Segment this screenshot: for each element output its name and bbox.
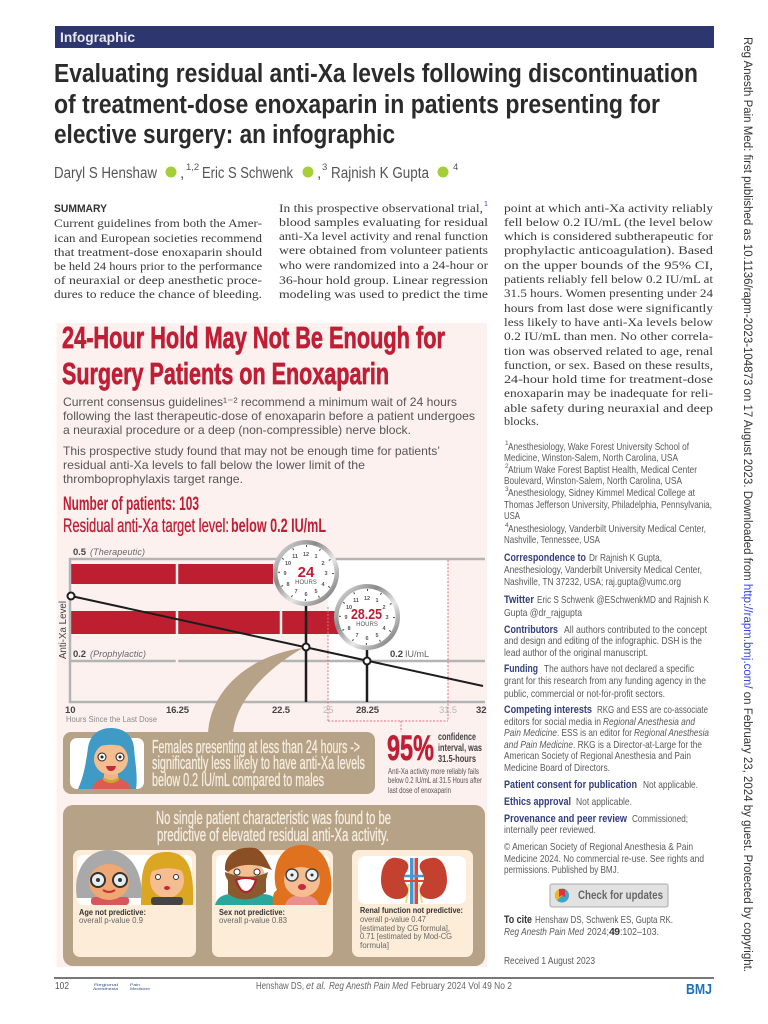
ethics approval: Ethics approval <box>504 796 571 808</box>
clock: 28.25 hours: 4 <box>382 626 386 632</box>
panel: no predictive characteristic: No single patient characteristic was found to be <box>156 808 391 828</box>
line chart: anti-Xa level over time: 0.2 <box>73 649 86 660</box>
summary column 2: anti-Xa level activity and renal function <box>279 229 488 243</box>
affiliations: 3 <box>505 486 509 493</box>
infographic heading <box>62 321 445 391</box>
button: check for updates: Check for updates <box>578 890 663 902</box>
correspondence <box>504 552 702 588</box>
citation: Reg Anesth Pain Med <box>504 927 585 938</box>
banner: Infographic <box>55 26 714 48</box>
clock: 28.25 hours: 10 <box>346 605 352 611</box>
summary column 3: on the upper bounds of the 95% CI, <box>504 258 713 272</box>
competing interests: Regional Anesthesia and <box>603 717 696 728</box>
clock: 28.25 hours: 5 <box>375 633 379 639</box>
clock: 28.25 hours: 1 <box>375 598 379 604</box>
footer: BMJ <box>686 981 712 998</box>
summary column 3: function, or sex. Based on these results, <box>504 358 713 372</box>
competing interests: Pain Medicine <box>504 728 557 739</box>
summary column 3: fell below 0.2 IU/mL (the level below <box>504 215 713 229</box>
summary column 1: be held 24 hours prior to the performance <box>54 259 262 273</box>
footer: Pain <box>130 982 140 987</box>
button: check for updates <box>550 884 668 907</box>
card: sex: overall p-value 0.83 <box>219 916 288 925</box>
study numbers: Number of patients: 103 <box>63 494 199 515</box>
ethics approval <box>504 796 632 808</box>
contributors: and design and editing of the infographic. DSH is the <box>504 636 702 647</box>
clock: 28.25 hours: HOURS <box>356 622 378 628</box>
callout: 95% confidence interval: 95% <box>387 729 434 768</box>
copyright: © American Society of Regional Anesthesia & Pain <box>504 842 693 853</box>
icon: man and woman <box>215 845 331 905</box>
correspondence: Correspondence to <box>504 552 586 564</box>
clock: 28.25 hours: 2 <box>382 605 386 611</box>
clock: 24 hours: 24 <box>298 564 315 581</box>
summary column 3: enoxaparin may be inadequate for reli- <box>504 386 713 400</box>
intro text: residual anti-Xa levels to fall below the lower limit of the <box>63 458 365 472</box>
footer: et al. <box>306 980 326 992</box>
funding: Funding <box>504 663 538 675</box>
footer: Reg Anesth Pain Med <box>329 980 409 992</box>
summary column 3: prophylactic anticoagulation). Based <box>504 243 713 257</box>
clock: 24 hours: HOURS <box>295 580 317 586</box>
card: renal function: overall p-value 0.47 <box>360 915 427 924</box>
summary column 2: In this prospective observational trial, <box>279 201 483 215</box>
provenance: Commissioned; <box>632 814 688 825</box>
competing interests: . RKG is a Director-at-Large for the <box>573 740 702 751</box>
study numbers: Residual anti-Xa target level: <box>63 516 229 537</box>
clock: 24 hours: 6 <box>304 592 308 598</box>
icon: kidneys <box>381 858 447 904</box>
affiliations: USA <box>504 511 520 522</box>
clock: 24 hours <box>273 540 339 606</box>
card: renal function <box>352 850 473 957</box>
summary column 3: hours from last dose were significantly <box>504 301 713 315</box>
twitter <box>504 594 709 619</box>
line chart: anti-Xa level over time: 16.25 <box>166 705 190 716</box>
infographic heading: Surgery Patients on Enoxaparin <box>62 357 389 391</box>
card: age <box>73 850 196 957</box>
callout: 95% confidence interval: 31.5-hours <box>438 753 476 765</box>
affiliations: Boulevard, Winston-Salem, North Carolina, USA <box>504 476 682 487</box>
clock: 24 hours: 8 <box>286 582 290 588</box>
card: sex: Sex not predictive: <box>219 908 285 917</box>
card: renal function: Renal function not predictive: <box>360 906 463 915</box>
twitter: Twitter <box>504 594 535 606</box>
summary column 1 <box>54 203 262 301</box>
clock: 24 hours: 4 <box>321 582 325 588</box>
summary column 3: 0.2 IU/mL than men. No other correla- <box>504 329 713 343</box>
ethics approval: Not applicable. <box>576 797 632 808</box>
title: elective surgery: an infographic <box>54 121 395 149</box>
affiliations: 1 <box>505 440 509 447</box>
callout: 95% confidence interval: confidence <box>438 731 476 743</box>
authors: 3 <box>322 162 327 173</box>
summary column 2: blood samples evaluating for residual <box>279 215 489 229</box>
title: of treatment-dose enoxaparin in patients presenting for <box>54 91 660 119</box>
footer: Anesthesia <box>93 986 119 991</box>
icon: older and younger women <box>76 850 193 905</box>
funding: The authors have not declared a specific <box>544 664 694 675</box>
footer: 102 <box>55 980 69 992</box>
patient consent: Patient consent for publication <box>504 779 637 791</box>
citation: :102–103. <box>620 927 659 938</box>
authors: , <box>317 165 321 182</box>
line chart: anti-Xa level over time: 32 <box>476 705 487 716</box>
intro text: This prospective study found that may not be enough time for patients’ <box>63 444 440 458</box>
affiliations: Anesthesiology, Vanderbilt University Medical Center, <box>508 524 706 535</box>
line chart: anti-Xa level over time: Hours Since the Last Dose <box>66 714 157 724</box>
callout: 95% confidence interval <box>387 729 482 795</box>
contributors: lead author of the original manuscript. <box>504 648 648 659</box>
clock: 24 hours: 5 <box>314 589 318 595</box>
study numbers <box>63 494 326 537</box>
callout: 95% confidence interval: last dose of enoxaparin <box>388 785 451 795</box>
affiliations: Medicine, Winston-Salem, North Carolina, USA <box>504 453 678 464</box>
provenance: internally peer reviewed. <box>504 825 596 836</box>
line chart: anti-Xa level over time: (Therapeutic) <box>90 547 145 557</box>
card: renal function: formula] <box>360 941 389 950</box>
line chart: anti-Xa level over time <box>58 540 487 735</box>
summary column 3: patients reliably fell below 0.2 IU/mL at <box>504 272 714 286</box>
correspondence: Dr Rajnish K Gupta, <box>589 553 662 564</box>
line chart: anti-Xa level over time: (Prophylactic) <box>90 649 146 659</box>
line chart: anti-Xa level over time: 31.5 <box>439 705 457 716</box>
summary column 3: less likely to have anti-Xa levels below <box>504 315 713 329</box>
summary column 3: tion was observed related to age, renal <box>504 344 714 358</box>
card: age: Age not predictive: <box>79 908 146 917</box>
funding: grant for this research from any funding agency in the <box>504 676 706 687</box>
patient consent: Not applicable. <box>643 780 698 791</box>
callout: 95% confidence interval: below 0.2 IU/mL at 31.5 Hours after <box>388 775 482 785</box>
affiliations <box>504 440 712 546</box>
correspondence: Anesthesiology, Vanderbilt University Medical Center, <box>504 565 702 576</box>
affiliations: Anesthesiology, Wake Forest University School of <box>508 442 689 453</box>
authors: Rajnish K Gupta <box>331 165 429 182</box>
authors: , <box>180 165 184 182</box>
citation: Henshaw DS, Schwenk ES, Gupta RK. <box>535 915 673 926</box>
line chart: anti-Xa level over time: Anti-Xa Level <box>58 601 69 659</box>
citation: 49 <box>609 927 620 938</box>
summary column 3: able safety during neuraxial and deep <box>504 401 713 415</box>
received date: Received 1 August 2023 <box>504 956 595 967</box>
affiliations: 4 <box>505 522 509 529</box>
competing interests: American Society of Regional Anesthesia and Pain <box>504 751 691 762</box>
provenance <box>504 813 688 836</box>
summary column 3 <box>504 201 714 428</box>
line chart: anti-Xa level over time: 0.2 <box>390 649 403 660</box>
panel: no predictive characteristic <box>63 805 485 966</box>
banner: Infographic: Infographic <box>60 30 136 45</box>
competing interests: RKG and ESS are co-associate <box>597 705 708 716</box>
summary column 1: SUMMARY <box>54 203 108 215</box>
clock: 24 hours: 2 <box>321 561 325 567</box>
footer: February 2024 Vol 49 No 2 <box>411 980 512 992</box>
intro text <box>63 395 475 486</box>
clock: 24 hours: 7 <box>294 589 298 595</box>
summary column 2: were obtained from volunteer patients <box>279 243 488 257</box>
copyright: permissions. Published by BMJ. <box>504 865 619 876</box>
affiliations: Atrium Wake Forest Baptist Health, Medical Center <box>508 465 697 476</box>
twitter: Eric S Schwenk @ESchwenkMD and Rajnish K <box>537 595 709 606</box>
panel: no predictive characteristic: predictive of elevated residual anti-Xa activity. <box>157 825 389 845</box>
summary column 2: 36-hour hold group. Linear regression <box>279 273 488 287</box>
summary column 1: of neuraxial or deep anesthetic proce- <box>54 273 262 287</box>
callout: 95% confidence interval: Anti-Xa activity more reliably fails <box>388 766 479 776</box>
line chart: anti-Xa level over time: 25 <box>323 705 334 716</box>
contributors: Contributors <box>504 624 558 636</box>
title <box>54 60 698 149</box>
clock: 28.25 hours: 8 <box>347 626 351 632</box>
callout: females: below 0.2 IU/mL compared to males <box>152 770 324 790</box>
provenance: Provenance and peer review <box>504 813 628 825</box>
icon: girl with blue hair <box>78 728 137 789</box>
authors: 4 <box>453 162 458 173</box>
summary column 1: Current guidelines from both the Amer- <box>54 216 262 230</box>
authors: Eric S Schwenk <box>202 165 293 182</box>
competing interests: editors for social media in <box>504 717 601 728</box>
side note: publication notice: Reg Anesth Pain Med: first published as 10.1136/rapm-2023-104873 on 17 August 2023. Downloaded from http://rapm.bmj.com/ on February 23, 2024 by guest. Protected by copyright. <box>741 37 755 972</box>
callout: 95% confidence interval: interval, was <box>438 742 482 754</box>
twitter: Gupta @dr_rajgupta <box>504 608 582 619</box>
competing interests: Competing interests <box>504 704 592 716</box>
citation: To cite <box>504 914 532 926</box>
footer: Regional <box>94 982 118 987</box>
footer <box>54 977 714 998</box>
summary column 3: 24-hour hold time for treatment-dose <box>504 372 713 386</box>
clock: 28.25 hours: 3 <box>385 615 389 621</box>
clock: 24 hours: 11 <box>292 554 298 560</box>
clock: 24 hours: 9 <box>283 571 287 577</box>
contributors <box>504 624 707 659</box>
citation <box>504 914 673 938</box>
clock: 28.25 hours: 28.25 <box>351 607 382 623</box>
competing interests <box>504 704 709 774</box>
summary column 2: modeling was used to predict the time <box>279 287 488 301</box>
summary column 3: blocks. <box>504 414 539 428</box>
clock: 24 hours: 12 <box>303 552 309 558</box>
callout: females: Females presenting at less than 24 hours -> <box>152 737 360 757</box>
affiliations: 2 <box>505 463 509 470</box>
clock: 28.25 hours: 12 <box>364 596 370 602</box>
affiliations: Nashville, Tennessee, USA <box>504 535 600 546</box>
clock: 24 hours: 3 <box>324 571 328 577</box>
line chart: anti-Xa level over time: 0.5 <box>73 547 87 558</box>
title: Evaluating residual anti-Xa levels following discontinuation <box>54 60 698 88</box>
competing interests: and Pain Medicine <box>504 740 573 751</box>
citation: 2024; <box>587 927 609 938</box>
copyright <box>504 842 704 876</box>
brown callout wedge <box>208 648 303 735</box>
clock: 28.25 hours: 11 <box>353 598 359 604</box>
summary column 1: dures to reduce the chance of bleeding. <box>54 287 262 301</box>
study numbers: below 0.2 IU/mL <box>231 516 326 537</box>
copyright: Medicine 2024. No commercial re-use. See rights and <box>504 854 704 865</box>
panel: infographic <box>56 321 487 967</box>
summary column 3: point at which anti-Xa activity reliably <box>504 201 713 215</box>
clock: 28.25 hours <box>334 584 400 650</box>
clock: 24 hours: 10 <box>285 561 291 567</box>
summary column 3: which is considered subtherapeutic for <box>504 229 713 243</box>
summary column 1: that treatment-dose enoxaparin should <box>54 245 262 259</box>
clock: 24 hours: 1 <box>314 554 318 560</box>
line chart: anti-Xa level over time: 22.5 <box>272 705 291 716</box>
footer: Medicine <box>130 986 151 991</box>
intro text: a neuraxial procedure or a deep (non-compressible) nerve block. <box>63 423 411 437</box>
summary column 3: 31.5 hours. Women presenting under 24 <box>504 286 713 300</box>
intro text: thromboprophylaxis target range. <box>63 472 243 486</box>
intro text: following the last therapeutic-dose of enoxaparin before a patient undergoes <box>63 409 475 423</box>
callout: females: significantly less likely to have anti-Xa levels <box>152 753 365 773</box>
contributors: All authors contributed to the concept <box>564 625 707 636</box>
affiliations: Anesthesiology, Sidney Kimmel Medical College at <box>508 488 695 499</box>
card: renal function: [estimated by CG formula], <box>360 924 450 933</box>
card: renal function: 0.71 [estimated by Mod-CG <box>360 932 452 941</box>
competing interests: Regional Anesthesia <box>634 728 709 739</box>
summary column 1: ican and European societies recommend <box>54 231 262 245</box>
line chart: anti-Xa level over time: 28.25 <box>356 705 380 716</box>
correspondence: Nashville, TN 37232, USA; raj.gupta@vumc.org <box>504 577 681 588</box>
summary column 2: 1 <box>484 201 488 208</box>
card: sex <box>212 845 333 957</box>
authors: Daryl S Henshaw <box>54 165 158 182</box>
summary column 2 <box>279 201 489 301</box>
summary column 2: who were randomized into a 24-hour or <box>279 258 488 272</box>
footer: Henshaw DS, <box>256 980 304 992</box>
line chart: anti-Xa level over time: IU/mL <box>405 649 429 659</box>
line chart: anti-Xa level over time: 10 <box>65 705 76 716</box>
competing interests: Medicine Board of Directors. <box>504 763 610 774</box>
funding <box>504 663 706 700</box>
clock: 28.25 hours: 9 <box>344 615 348 621</box>
intro text: Current consensus guidelines¹⁻² recommend a minimum wait of 24 hours <box>63 395 457 409</box>
clock: 28.25 hours: 6 <box>365 636 369 642</box>
authors: 1,2 <box>186 162 199 173</box>
clock: 28.25 hours: 7 <box>355 633 359 639</box>
card: age: overall p-value 0.9 <box>79 916 144 925</box>
competing interests: . ESS is an editor for <box>557 728 632 739</box>
affiliations: Thomas Jefferson University, Philadelphia, Pennsylvania, <box>504 500 712 511</box>
authors <box>54 162 458 182</box>
funding: public, commercial or not-for-profit sectors. <box>504 689 665 700</box>
callout: females <box>63 728 375 794</box>
infographic heading: 24-Hour Hold May Not Be Enough for <box>62 321 445 355</box>
